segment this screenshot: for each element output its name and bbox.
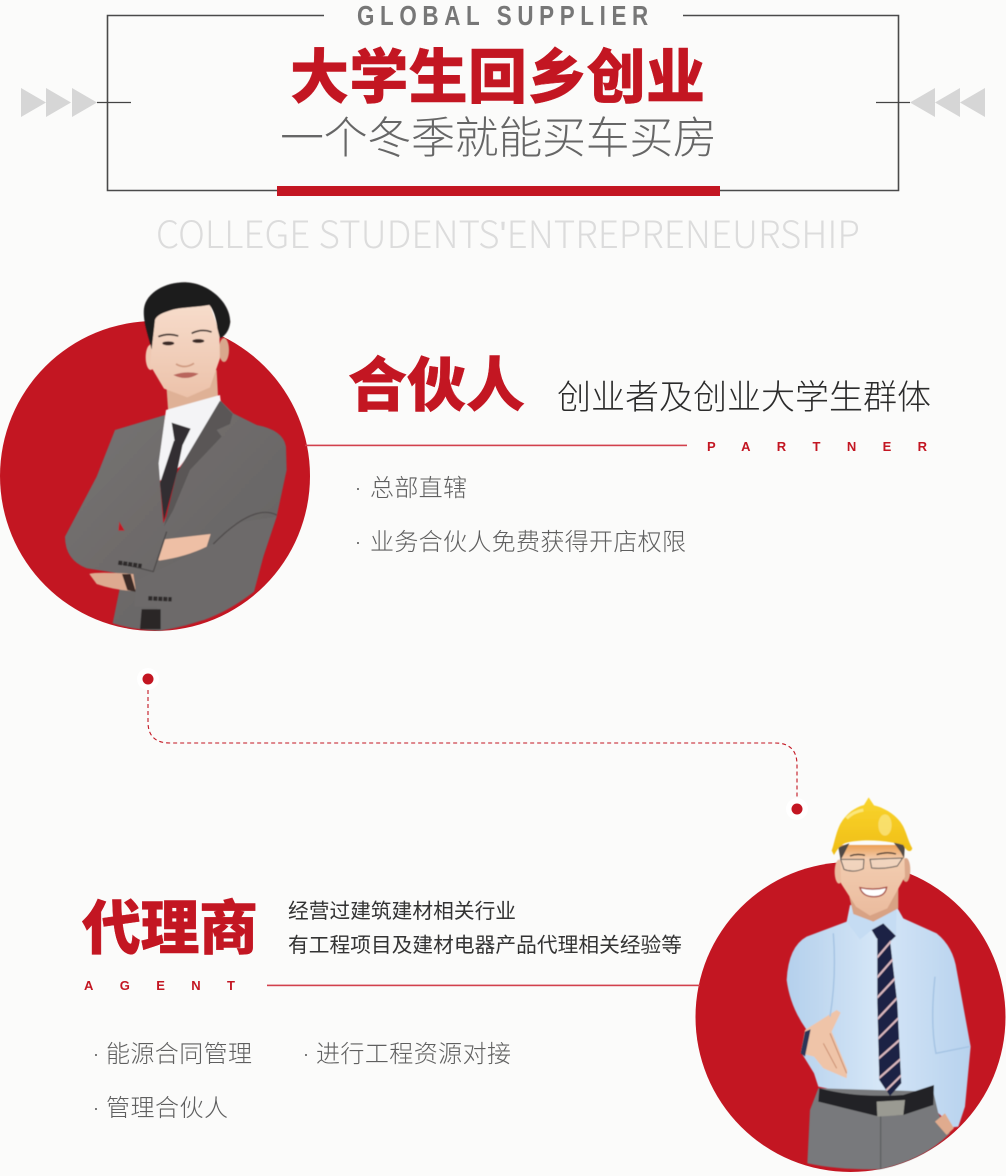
bullet: energy contract management: ·	[93, 1044, 99, 1064]
header section	[21, 1, 985, 259]
bullet: headquarters: 总部直辖	[370, 468, 467, 503]
connector line	[267, 985, 700, 986]
connector line	[305, 445, 687, 446]
tie stripes	[876, 940, 902, 1092]
description: agent	[288, 894, 682, 958]
bullet: manage partners: ·	[93, 1098, 99, 1118]
subtitle: 一个冬季就能买车买房	[280, 102, 717, 166]
red circle backdrop	[0, 321, 310, 631]
label: partner: PARTNER	[707, 439, 928, 454]
start dot	[137, 668, 159, 690]
bullet: free store permission: ·	[355, 532, 361, 552]
title frame	[108, 16, 898, 190]
red circle backdrop	[696, 862, 1006, 1172]
bullet: engineering resources: 进行工程资源对接	[316, 1034, 511, 1069]
portrait: engineer with yellow helmet	[787, 797, 971, 1169]
bullet: energy contract management: 能源合同管理	[106, 1034, 252, 1069]
main title: 大学生回乡创业	[290, 30, 705, 115]
heading: partner: 合伙人	[348, 338, 525, 423]
end dot	[786, 798, 808, 820]
bullet: free store permission: 业务合伙人免费获得开店权限	[370, 522, 686, 557]
left arrows	[21, 88, 131, 117]
label: agent: AGENT	[84, 978, 235, 993]
heading: agent: 代理商	[82, 881, 258, 966]
dashed connector between panels	[137, 668, 808, 820]
bullet: manage partners: 管理合伙人	[106, 1088, 228, 1123]
description: agent: 有工程项目及建材电器产品代理相关经验等	[288, 928, 682, 958]
panel: partner	[0, 282, 931, 631]
bullet: headquarters: ·	[355, 478, 361, 498]
portrait: businessman in grey suit	[65, 282, 287, 631]
right arrows	[876, 88, 985, 117]
description: partner: 创业者及创业大学生群体	[557, 370, 931, 419]
panel: agent	[82, 797, 1006, 1172]
description: agent: 经营过建筑建材相关行业	[288, 894, 516, 924]
bullet: engineering resources: ·	[303, 1044, 309, 1064]
label: global supplier: GLOBAL SUPPLIER	[357, 1, 648, 32]
english ghost heading: COLLEGE STUDENTS'ENTREPRENEURSHIP	[156, 204, 860, 259]
red underline bar	[277, 186, 720, 196]
